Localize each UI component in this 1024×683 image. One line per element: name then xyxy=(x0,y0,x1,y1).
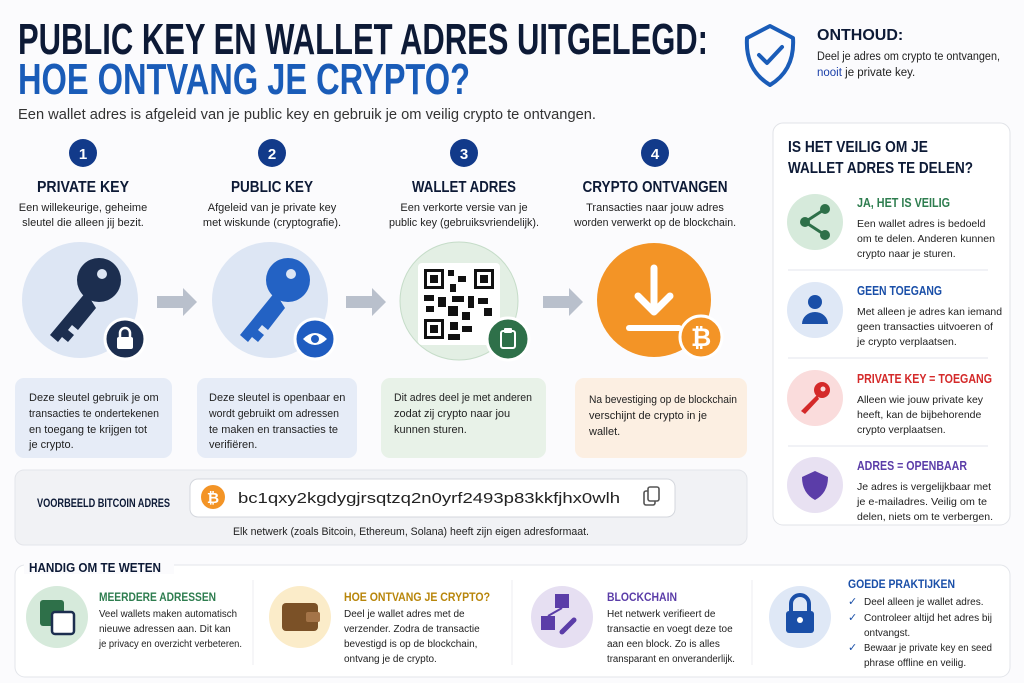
item: geen toegang: geen transacties uitvoeren of xyxy=(857,321,993,333)
tip: goede praktijken: ✓ xyxy=(848,612,857,624)
item: geen toegang: GEEN TOEGANG xyxy=(857,284,942,298)
callout: onthoud: nooit je private key. xyxy=(817,67,915,79)
tip: meerdere adressen: je privacy en overzicht verbeteren. xyxy=(98,639,242,650)
tip: meerdere adressen: MEERDERE ADRESSEN xyxy=(99,590,216,604)
panel: example address: bc1qxy2kgdygjrsqtzq2n0yrf2493p83kkfjhx0wlh xyxy=(238,490,620,507)
item: adres = openbaar xyxy=(787,457,993,523)
tip: meerdere adressen: Veel wallets maken automatisch xyxy=(99,609,237,620)
box 1: je crypto. xyxy=(28,439,74,451)
step 4: Transacties naar jouw adres xyxy=(586,202,724,214)
tip: hoe ontvang je crypto: bevestigd is op de blockchain, xyxy=(344,639,477,650)
step 3: WALLET ADRES xyxy=(412,179,516,196)
step 1: Een willekeurige, geheime xyxy=(19,202,147,214)
item: private key = toegang: PRIVATE KEY = TOEGANG xyxy=(857,372,992,386)
tip: goede praktijken: Deel alleen je wallet adres. xyxy=(864,597,984,608)
tip: hoe ontvang je crypto: HOE ONTVANG JE CRYPTO? xyxy=(344,590,490,604)
tip: meerdere adressen xyxy=(26,586,242,650)
tip: hoe ontvang je crypto: ontvang je de crypto. xyxy=(344,654,437,665)
item: veilig: JA, HET IS VEILIG xyxy=(857,196,950,210)
panel: handig om te weten: HANDIG OM TE WETEN xyxy=(29,560,161,575)
box 2: verifiëren. xyxy=(209,439,257,451)
tip: blockchain: transparant en onveranderlijk. xyxy=(607,654,735,665)
tip: goede praktijken: Bewaar je private key en seed xyxy=(864,643,992,654)
step 1: 1 xyxy=(79,146,87,163)
panel: example address xyxy=(15,470,747,545)
item: veilig: crypto naar je sturen. xyxy=(857,248,956,260)
step 3: 3 xyxy=(460,146,468,163)
callout: onthoud: Deel je adres om crypto te ontvangen, xyxy=(817,51,1000,63)
title xyxy=(18,15,708,104)
box 2 xyxy=(197,378,357,458)
tip: blockchain: aan een block. Zo is alles xyxy=(607,639,720,650)
tip: meerdere adressen: nieuwe adressen aan. Dit kan xyxy=(99,624,231,635)
item: adres = openbaar: delen, niets om te verbergen. xyxy=(857,511,993,523)
box 1: en toegang te krijgen tot xyxy=(29,424,147,436)
item: adres = openbaar: Je adres is vergelijkbaar met xyxy=(857,481,991,493)
box 4 xyxy=(575,378,747,458)
item: veilig: om te delen. Anderen kunnen xyxy=(857,233,995,245)
item: adres = openbaar: je e-mailadres. Veilig om te xyxy=(856,496,987,508)
tip: goede praktijken: ontvangst. xyxy=(864,628,910,639)
step 2: PUBLIC KEY xyxy=(231,179,313,196)
arrow 3 xyxy=(543,288,583,316)
panel: example address: ₿ xyxy=(207,490,219,507)
icon: receive: ₿ xyxy=(691,324,711,352)
arrow 1 xyxy=(157,288,197,316)
title: PUBLIC KEY EN WALLET ADRES UITGELEGD: xyxy=(18,15,708,64)
item: private key = toegang: crypto verplaatsen. xyxy=(857,424,946,436)
step 4: worden verwerkt op de blockchain. xyxy=(573,217,736,229)
tip: goede praktijken: Controleer altijd het adres bij xyxy=(864,613,992,624)
box 3 xyxy=(381,378,546,458)
step 4: 4 xyxy=(651,146,660,163)
item: veilig: Een wallet adres is bedoeld xyxy=(857,218,986,230)
tip: goede praktijken: phrase offline en veilig. xyxy=(864,658,966,669)
box 3: Dit adres deel je met anderen xyxy=(394,392,532,404)
panel: is het veilig: WALLET ADRES TE DELEN? xyxy=(788,160,973,177)
step 2 xyxy=(203,139,341,229)
tip: blockchain: transactie en voegt deze toe xyxy=(607,624,733,635)
callout: onthoud xyxy=(817,27,1000,79)
tip: goede praktijken: ✓ xyxy=(848,596,857,608)
step 1: PRIVATE KEY xyxy=(37,179,129,196)
tip: hoe ontvang je crypto xyxy=(269,586,490,665)
tip: blockchain: BLOCKCHAIN xyxy=(607,590,677,604)
box 2: Deze sleutel is openbaar en xyxy=(209,392,345,404)
box 1: transacties te ondertekenen xyxy=(29,408,159,420)
box 3: zodat zij crypto naar jou xyxy=(394,408,510,420)
tip: hoe ontvang je crypto: Deel je wallet adres met de xyxy=(344,609,465,620)
step 4 xyxy=(573,139,736,229)
step 2: 2 xyxy=(268,146,276,163)
item: private key = toegang: Alleen wie jouw private key xyxy=(857,394,984,406)
item: geen toegang: Met alleen je adres kan iemand xyxy=(857,306,1002,318)
subtitle: Een wallet adres is afgeleid van je public key en gebruik je om veilig crypto te ontvangen. xyxy=(18,106,596,123)
step 2: met wiskunde (cryptografie). xyxy=(203,217,341,229)
arrow 2 xyxy=(346,288,386,316)
step 1 xyxy=(19,139,147,229)
step 3: Een verkorte versie van je xyxy=(400,202,528,214)
box 4: wallet. xyxy=(588,426,620,438)
box 2: wordt gebruikt om adressen xyxy=(208,408,339,420)
step 2: Afgeleid van je private key xyxy=(208,202,337,214)
step 3: public key (gebruiksvriendelijk). xyxy=(389,217,539,229)
panel: is het veilig xyxy=(773,123,1010,525)
tip: hoe ontvang je crypto: verzender. Zodra de transactie xyxy=(344,624,480,635)
icon: QR code xyxy=(400,242,529,360)
box 4: verschijnt de crypto in je xyxy=(589,410,707,422)
box 1: Deze sleutel gebruik je om xyxy=(29,392,159,404)
panel: example address: Elk netwerk (zoals Bitcoin, Ethereum, Solana) heeft zijn eigen adresformaat. xyxy=(233,526,589,538)
box 3: kunnen sturen. xyxy=(394,424,467,436)
item: geen toegang xyxy=(787,282,1002,348)
tip: goede praktijken: ✓ xyxy=(848,642,857,654)
tip: blockchain: Het netwerk verifieert de xyxy=(607,609,716,620)
panel: is het veilig: IS HET VEILIG OM JE xyxy=(788,139,928,156)
panel: example address: VOORBEELD BITCOIN ADRES xyxy=(37,496,170,510)
icon: private key xyxy=(22,242,145,359)
box 2: te maken en transacties te xyxy=(209,424,338,436)
step 4: CRYPTO ONTVANGEN xyxy=(582,179,728,196)
step 1: sleutel die alleen jij bezit. xyxy=(22,217,144,229)
box 4: Na bevestiging op de blockchain xyxy=(589,394,737,406)
box 1 xyxy=(15,378,172,458)
callout: onthoud: ONTHOUD: xyxy=(817,27,903,44)
title: HOE ONTVANG JE CRYPTO? xyxy=(18,55,470,104)
item: geen toegang: je crypto verplaatsen. xyxy=(856,336,957,348)
item: veilig xyxy=(787,194,995,260)
item: private key = toegang xyxy=(787,370,992,436)
panel: handig om te weten xyxy=(15,558,1010,677)
item: adres = openbaar: ADRES = OPENBAAR xyxy=(857,459,967,473)
item: private key = toegang: heeft, kan de bijbehorende xyxy=(857,409,982,421)
icon: public key xyxy=(212,242,335,359)
step 3 xyxy=(389,139,539,229)
icon: shield check xyxy=(747,26,793,85)
tip: goede praktijken: GOEDE PRAKTIJKEN xyxy=(848,577,955,591)
tip: blockchain xyxy=(531,586,735,665)
tip: goede praktijken xyxy=(769,577,992,669)
icon: receive xyxy=(597,243,722,358)
